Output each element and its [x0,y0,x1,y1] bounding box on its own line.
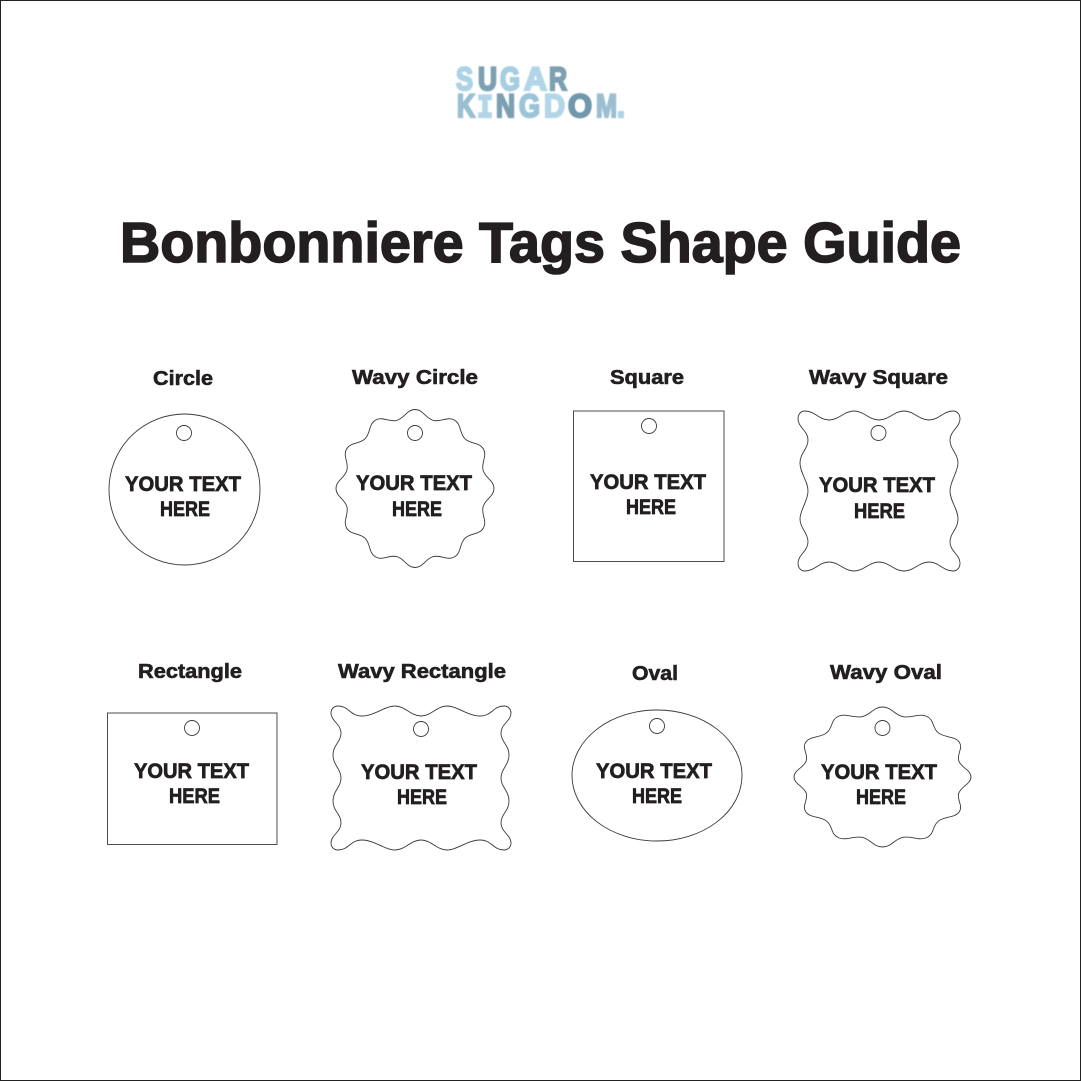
tag text: HERE [854,500,905,523]
label: Wavy Rectangle: Wavy Rectangle [338,661,506,683]
shape: wavy circle [336,410,494,568]
tag text: HERE [856,786,906,809]
tag hole [184,720,200,736]
tag text: YOUR TEXT [590,471,706,494]
logo: Sugar Kingdom: . [617,88,625,124]
label: Wavy Square: Wavy Square [809,367,948,389]
logo: Sugar Kingdom: G [500,61,520,97]
tag text [821,761,937,809]
tag text: HERE [160,498,210,521]
logo: Sugar Kingdom: S [456,61,473,97]
panel: square tag [574,367,724,562]
label: Wavy Circle: Wavy Circle [352,367,478,389]
tag text: HERE [392,498,442,521]
tag text [590,471,706,519]
panel: wavy oval tag [794,662,971,847]
tag text: YOUR TEXT [356,472,472,495]
shape: circle [109,414,260,565]
tag text: YOUR TEXT [596,760,712,783]
panel: oval tag [572,663,742,841]
label: Rectangle: Rectangle [138,661,242,683]
label: Square: Square [610,367,684,389]
shape: square [574,411,724,562]
logo: Sugar Kingdom [456,61,625,127]
tag hole [176,426,192,440]
logo: Sugar Kingdom: U [478,61,497,97]
panel: wavy circle tag [336,367,494,568]
logo: Sugar Kingdom: K [457,88,475,124]
tag text: YOUR TEXT [819,474,935,497]
label: Circle: Circle [153,368,213,390]
tag text [134,760,249,808]
tag text: YOUR TEXT [821,761,937,784]
logo: Sugar Kingdom: N [496,88,515,124]
logo: Sugar Kingdom: I [477,90,493,127]
logo: Sugar Kingdom: G [519,88,540,124]
tag hole [408,426,422,440]
label: Oval: Oval [632,663,678,685]
shape: rectangle [108,713,277,844]
tag hole [650,718,664,734]
shape: wavy oval [794,707,971,847]
shape: oval [572,710,742,841]
tag hole [875,720,890,736]
logo: Sugar Kingdom: R [549,61,567,97]
tag text [125,473,241,521]
panel: wavy rectangle tag [331,661,511,850]
tag text: YOUR TEXT [361,761,477,784]
tag text: HERE [632,785,682,808]
shape: wavy square [798,411,960,571]
tag text: YOUR TEXT [134,760,249,783]
logo: Sugar Kingdom: D [544,88,565,124]
tag text: HERE [626,496,676,519]
logo: Sugar Kingdom: A [524,61,547,97]
panel: circle tag [109,368,260,565]
label: Wavy Oval: Wavy Oval [830,662,942,684]
panel: rectangle tag [108,661,277,844]
tag hole [642,418,656,434]
tag hole [871,426,886,440]
tag text [819,474,935,523]
tag text [596,760,712,808]
tag text: YOUR TEXT [125,473,241,496]
shape: wavy rectangle [331,706,511,850]
logo: Sugar Kingdom: O [568,88,592,124]
tag hole [414,722,428,736]
tag text: HERE [397,786,447,809]
panel: wavy square tag [798,367,960,571]
title: Bonbonniere Tags Shape Guide [120,211,961,275]
tag text [361,761,477,809]
logo: Sugar Kingdom: M [596,88,617,124]
tag text: HERE [169,785,220,808]
tag text [356,472,472,521]
